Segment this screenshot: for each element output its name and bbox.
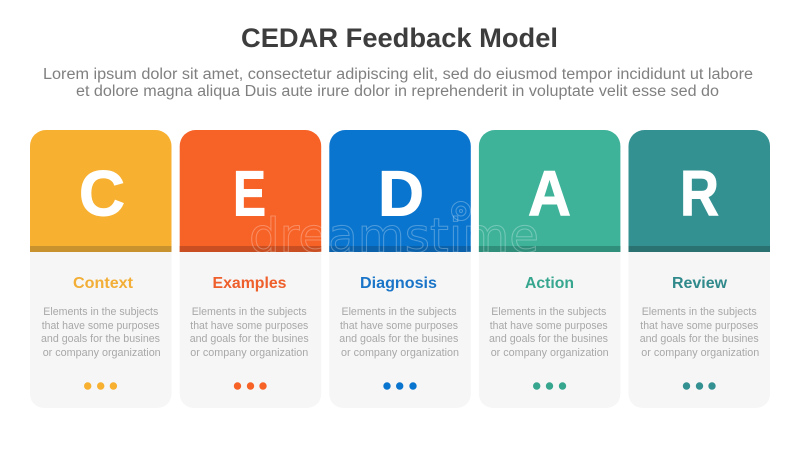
panel: Context: that have some purposes <box>42 320 160 332</box>
panel: Examples: that have some purposes <box>190 320 309 332</box>
panel: Action: Elements in the subjects <box>491 306 607 318</box>
panel: Diagnosis: and goals for the busines <box>339 333 459 345</box>
title: CEDAR Feedback Model <box>241 23 558 53</box>
subtitle <box>43 66 753 100</box>
panel: Diagnosis <box>329 130 471 408</box>
panel: Diagnosis: D <box>378 158 424 230</box>
watermark: dreamstime <box>249 209 539 264</box>
panel: Context: and goals for the busines <box>41 333 160 345</box>
panel: Context: or company organization <box>43 347 161 359</box>
panel: Examples: Elements in the subjects <box>192 306 307 318</box>
panel: Action: that have some purposes <box>490 320 608 332</box>
panel: Context <box>30 130 172 408</box>
subtitle: et dolore magna aliqua Duis aute irure dolor in reprehenderit in voluptate velit esse sed do <box>76 83 719 100</box>
panel: Diagnosis: that have some purposes <box>340 320 458 332</box>
panel: Action: A <box>528 158 571 230</box>
panel: Review: Elements in the subjects <box>642 306 757 318</box>
panel: Review <box>628 130 770 408</box>
panel: Context: Elements in the subjects <box>43 306 159 318</box>
subtitle: Lorem ipsum dolor sit amet, consectetur adipiscing elit, sed do eiusmod tempor incididunt ut labore <box>43 66 753 83</box>
panel: Diagnosis: Elements in the subjects <box>342 306 457 318</box>
panel: Context: C <box>79 158 125 230</box>
panel: Review: or company organization <box>641 347 759 359</box>
panel: Examples: or company organization <box>190 347 308 359</box>
panel: Review: Review <box>672 275 728 292</box>
panel: Examples <box>180 130 321 408</box>
panel: Action: Action <box>525 275 574 292</box>
panel: Diagnosis: Diagnosis <box>360 275 437 292</box>
panel: Examples: Examples <box>212 275 287 292</box>
panel: Review: and goals for the busines <box>640 333 759 345</box>
panel: Examples: and goals for the busines <box>190 333 309 345</box>
panel: Action: or company organization <box>491 347 609 359</box>
panel: Review: that have some purposes <box>640 320 759 332</box>
panel: Review: R <box>680 158 719 230</box>
panel: Action <box>479 130 620 408</box>
panel: Examples: E <box>233 158 266 230</box>
panel: Diagnosis: or company organization <box>341 347 459 359</box>
panel: Action: and goals for the busines <box>489 333 608 345</box>
panel: Context: Context <box>73 275 134 292</box>
